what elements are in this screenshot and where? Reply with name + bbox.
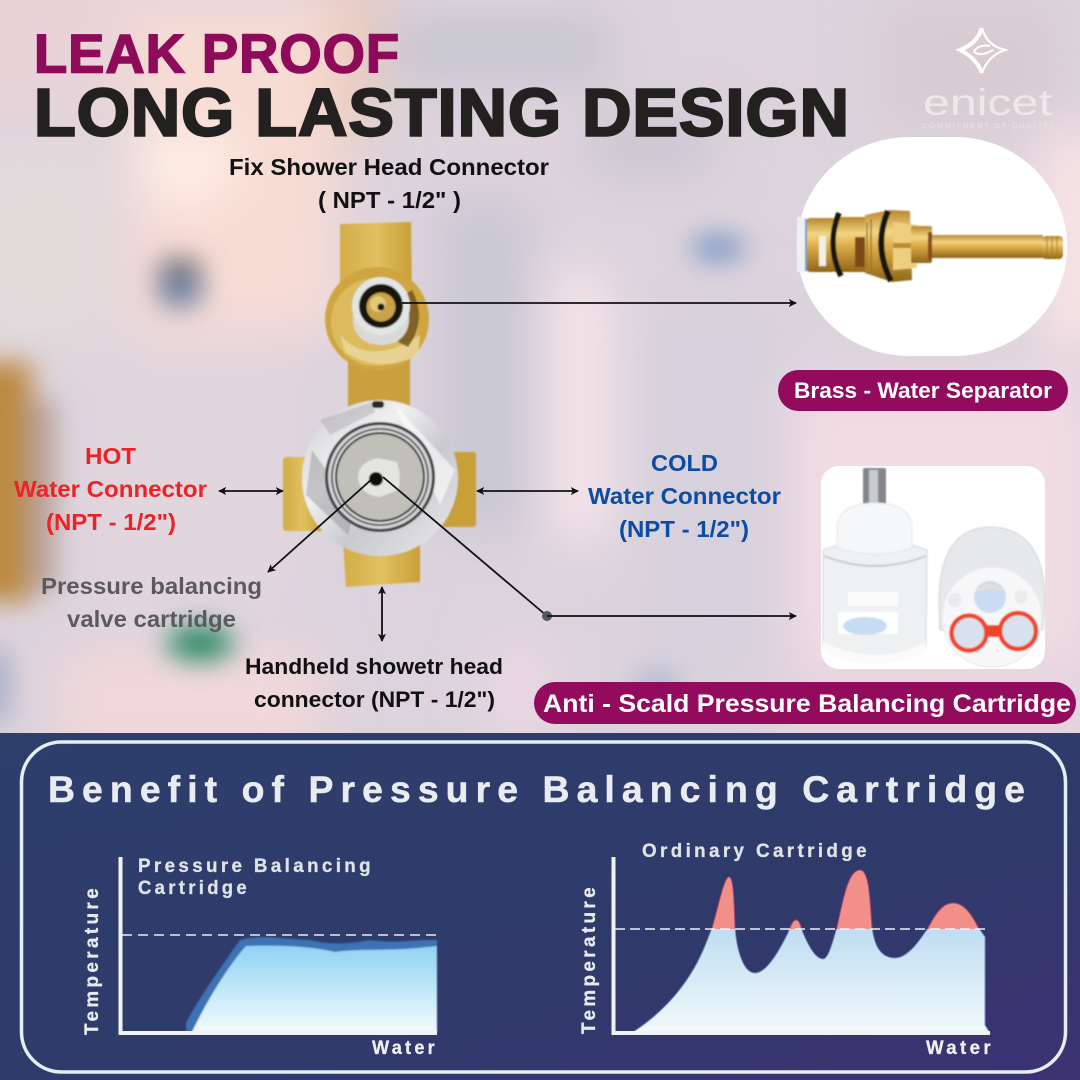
badge: brass water separator — [778, 370, 1068, 411]
arrow: hot connector — [219, 490, 283, 492]
label: hot water connector — [14, 443, 207, 535]
chart: ordinary cartridge — [578, 840, 994, 1059]
axes — [120, 857, 437, 1033]
limit line — [615, 928, 986, 930]
label: hot water connector: HOT — [85, 443, 137, 469]
background: blurred room — [0, 0, 1080, 750]
icon: logo star — [960, 28, 1005, 73]
top brass stem — [340, 222, 412, 300]
panel outline — [22, 742, 1066, 1072]
title line: leak proof: LEAK PROOF — [34, 22, 400, 84]
limit line — [122, 934, 437, 936]
illustration: brass separator part — [797, 210, 1063, 282]
side connector left — [283, 457, 323, 531]
shower outlet — [325, 267, 429, 371]
arrow: elbow to anti-scald cartridge — [383, 477, 796, 621]
badge: anti-scald cartridge — [534, 682, 1076, 724]
label: pressure balancing valve cartridge: valve cartridge — [67, 606, 236, 632]
title line: long lasting design: LONG LASTING DESIGN — [34, 76, 850, 150]
chrome housing — [302, 400, 458, 556]
label: fix shower head connector — [229, 154, 549, 213]
chart title: Pressure Balancing — [138, 855, 374, 877]
label: cold water connector: Water Connector — [588, 483, 781, 509]
area: temperature peaks above limit — [711, 870, 980, 929]
area: steady temperature — [186, 937, 437, 1032]
label: hot water connector: Water Connector — [14, 476, 207, 502]
title — [34, 22, 850, 150]
label: fix shower head connector: Fix Shower Head Connector — [229, 154, 549, 180]
chart title — [138, 855, 374, 899]
label: cold water connector: (NPT - 1/2") — [619, 516, 749, 542]
y axis label: Temperature — [81, 885, 103, 1035]
panel: anti-scald cartridge photo — [821, 466, 1045, 669]
badge: anti-scald cartridge: Anti - Scald Pressure Balancing Cartridge — [543, 690, 1071, 718]
panel: benefit of pressure balancing cartridge — [0, 733, 1080, 1080]
logo: enicet — [922, 28, 1054, 130]
side connector right — [440, 452, 476, 527]
bottom connector — [343, 540, 420, 587]
chart title: Cartridge — [138, 877, 250, 899]
area: water temperature below limit — [634, 929, 991, 1034]
axes — [614, 857, 990, 1033]
neck — [348, 350, 410, 410]
x axis label: Water — [926, 1037, 994, 1059]
arrow: handheld connector — [381, 587, 383, 641]
label: cold water connector: COLD — [651, 450, 718, 476]
badge: brass water separator: Brass - Water Separator — [794, 378, 1052, 403]
panel: brass water separator photo — [797, 137, 1067, 356]
valve body illustration — [283, 222, 476, 587]
arrow: shower outlet to brass separator — [402, 302, 796, 304]
label: pressure balancing valve cartridge: Pressure balancing — [41, 573, 262, 599]
label: fix shower head connector: ( NPT - 1/2" ) — [318, 187, 461, 213]
label: cold water connector — [588, 450, 781, 542]
arrow: pressure valve cartridge — [268, 479, 372, 572]
illustration: cartridge bottom view — [939, 527, 1045, 667]
logo wordmark: enicet — [923, 82, 1053, 123]
panel heading: Benefit of Pressure Balancing Cartridge — [48, 769, 1032, 810]
label: handheld shower head connector: connector (NPT - 1/2") — [254, 687, 495, 712]
logo tagline: COMMITMENT OF QUALITY — [922, 121, 1054, 130]
illustration: cartridge side view — [823, 468, 927, 664]
label: handheld shower head connector: Handheld showetr head — [245, 654, 503, 679]
x axis label: Water — [372, 1037, 438, 1059]
y axis label: Temperature — [578, 884, 600, 1034]
label: handheld shower head connector — [245, 654, 503, 712]
label: pressure balancing valve cartridge — [41, 573, 262, 632]
chart title: Ordinary Cartridge — [642, 840, 870, 862]
chart: pressure balancing cartridge — [81, 855, 438, 1059]
label: hot water connector: (NPT - 1/2") — [46, 509, 176, 535]
arrow: cold connector — [477, 490, 578, 492]
